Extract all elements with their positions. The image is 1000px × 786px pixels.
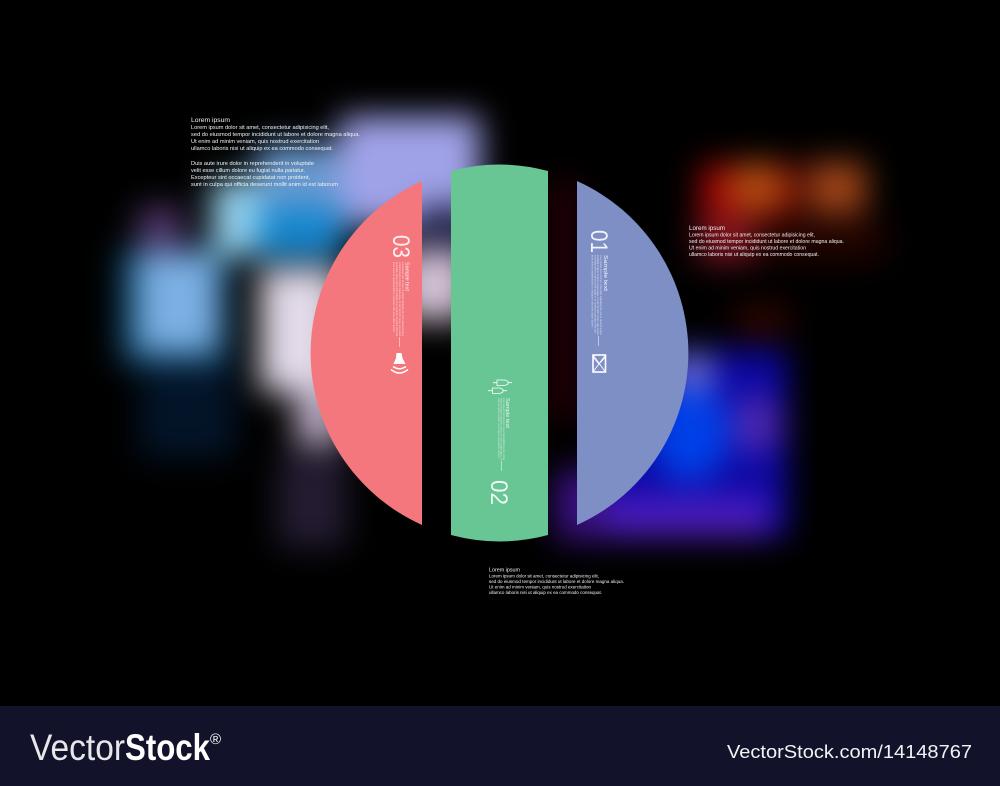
logo: VectorStock: Stock	[125, 727, 210, 768]
tiny body text 03: irure dolor in reprehenderit in voluptate velit esse cillum dolore	[392, 262, 396, 333]
tiny body text 01	[591, 255, 602, 336]
text block: top left	[191, 117, 360, 188]
tiny body text 03	[392, 262, 405, 336]
text block: right: Lorem ipsum dolor sit amet, consectetur adipisicing elit,	[689, 232, 815, 238]
tiny body text 02: Lorem ipsum dolor sit amet, consectetur adipisicing elit, sed do	[502, 398, 505, 461]
text block: top left: sed do eiusmod tempor incididunt ut labore et dolore magna aliqua.	[191, 132, 360, 138]
text block: bottom: ullamco laboris nisi ut aliquip ex ea commodo consequat.	[489, 590, 602, 595]
blurred background light shapes	[120, 116, 884, 547]
text block: bottom: Lorem ipsum	[489, 568, 520, 574]
icon: envelope	[593, 355, 606, 372]
number 01: 01	[585, 230, 612, 253]
text block: right: Lorem ipsum	[689, 226, 725, 232]
stock url: VectorStock.com/14148767	[727, 741, 972, 762]
text block: right	[689, 226, 844, 258]
icon: plugs	[488, 380, 512, 394]
tiny body text 01: irure dolor in reprehenderit in voluptate velit esse cillum dolore	[591, 255, 594, 328]
sample text heading 03: Sample text	[404, 262, 410, 291]
tiny body text 01: Lorem ipsum dolor sit amet, consectetur adipisicing elit, sed do eiusmod tempor	[599, 255, 602, 335]
logo: VectorStock: Vector	[30, 727, 125, 768]
text block: bottom: Ut enim ad minim veniam, quis nostrud exercitation	[489, 584, 591, 590]
number 02: 02	[485, 480, 512, 505]
tiny body text 02: enim ad minim veniam, quis nostrud exercitation ullamco	[497, 398, 500, 459]
text block: top left: Duis aute irure dolor in reprehenderit in voluptate	[191, 161, 314, 167]
panel 03: red circle segment	[311, 181, 422, 525]
text block: bottom: Lorem ipsum dolor sit amet, consectetur adipisicing elit,	[489, 574, 599, 578]
logo: VectorStock: ®	[210, 731, 221, 748]
panel 01: blue circle segment	[577, 181, 688, 525]
tiny body text 03: incididunt ut labore et dolore magna aliqua. Ut enim ad minim veniam, quis nostrud	[398, 262, 402, 336]
text block: bottom	[489, 568, 624, 595]
footer band	[0, 706, 1000, 786]
tiny body text 02	[497, 398, 505, 461]
tiny body text 03: Lorem ipsum dolor sit amet, consectetur adipisicing elit, sed do eiusmod tempor	[401, 262, 405, 336]
tiny body text 03: exercitation ullamco laboris nisi ut aliquip ex ea commodo consequat. Duis aute	[395, 262, 399, 336]
sample text heading 01: Sample text	[602, 255, 608, 292]
text block: top left: sunt in culpa qui officia deserunt mollit anim id est laborum	[191, 182, 338, 188]
text block: bottom: sed do eiusmod tempor incididunt ut labore et dolore magna aliqua.	[489, 579, 624, 584]
text block: top left: Lorem ipsum	[191, 117, 230, 124]
tiny body text 01: exercitation ullamco laboris nisi ut aliquip ex ea commodo consequat. Duis aute	[593, 255, 596, 334]
logo: VectorStock	[30, 727, 221, 768]
icon: bell with waves	[391, 353, 408, 373]
panel 02: green circle segment	[451, 165, 548, 541]
number 03: 03	[387, 235, 414, 258]
text block: top left: ullamco laboris nisi ut aliquip ex ea commodo consequat.	[191, 146, 333, 152]
text block: right: ullamco laboris nisi ut aliquip ex ea commodo consequat.	[689, 252, 819, 258]
text block: top left: velit esse cillum dolore eu fugiat nulla pariatur.	[191, 168, 305, 174]
text block: right: Ut enim ad minim veniam, quis nostrud exercitation	[689, 246, 806, 252]
text block: top left: Ut enim ad minim veniam, quis nostrud exercitation	[191, 139, 319, 145]
tiny body text 02: eiusmod tempor incididunt ut labore et dolore magna aliqua. Ut	[500, 398, 502, 460]
text block: top left: Excepteur sint occaecat cupidatat non proident,	[191, 175, 310, 181]
text block: right: sed do eiusmod tempor incididunt ut labore et dolore magna aliqua.	[689, 239, 844, 245]
tiny body text 01: incididunt ut labore et dolore magna aliqua. Ut enim ad minim veniam, quis nostrud	[596, 255, 599, 336]
text block: top left: Lorem ipsum dolor sit amet, consectetur adipisicing elit,	[191, 125, 329, 131]
sample text heading 02: Sample text	[504, 398, 510, 429]
